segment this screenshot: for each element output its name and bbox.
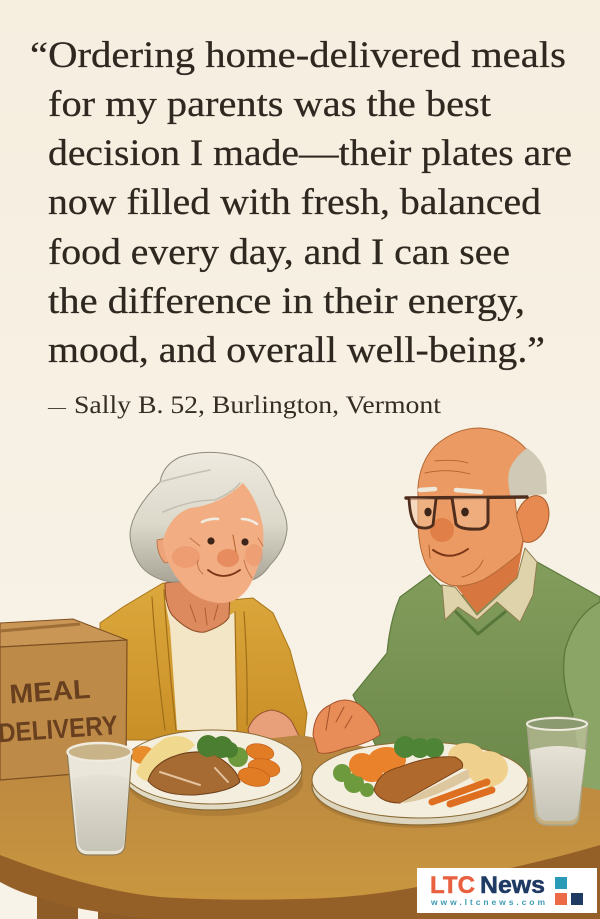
man smile — [433, 549, 468, 556]
man v-neck — [456, 612, 505, 634]
man neck — [455, 540, 524, 613]
potato — [448, 743, 508, 787]
woman hand — [248, 710, 300, 740]
man ear — [509, 491, 555, 547]
man eyebrows — [420, 489, 481, 492]
logo wordmark: LTC — [430, 872, 475, 899]
woman neck — [165, 580, 230, 632]
box top — [0, 619, 127, 647]
left meal plate — [122, 730, 303, 816]
broccoli — [394, 736, 444, 758]
broccoli — [197, 735, 248, 767]
woman eyes — [207, 537, 249, 546]
right meal plate — [312, 736, 528, 828]
attribution: Sally B. 52, Burlington, Vermont — [74, 392, 441, 419]
woman cardigan — [100, 583, 307, 740]
woman wrinkles — [190, 538, 263, 578]
right water glass — [527, 717, 588, 825]
quote text: decision I made—their plates are — [48, 133, 572, 174]
man sweater — [353, 562, 600, 800]
man eyes — [424, 508, 469, 516]
man glasses — [406, 497, 527, 529]
meat — [148, 752, 240, 795]
woman ear — [157, 538, 172, 563]
man hand — [313, 700, 380, 753]
table edge — [0, 840, 600, 919]
quote text: now filled with fresh, balanced — [48, 182, 542, 223]
LTC News logo: News — [480, 872, 545, 899]
man collar — [442, 548, 537, 622]
woman cardigan edges — [152, 590, 247, 730]
woman smile — [208, 570, 240, 576]
quote text: for my parents was the best — [48, 84, 492, 125]
man forehead lines — [425, 460, 470, 474]
man nose — [430, 518, 454, 542]
quote text: mood, and overall well-being.” — [48, 330, 545, 371]
delivery box — [0, 619, 127, 780]
box front — [0, 640, 127, 780]
logo url: www.ltcnews.com — [430, 897, 545, 907]
brussels sprouts — [333, 764, 374, 797]
woman shirt — [165, 600, 237, 730]
quote text — [30, 35, 572, 371]
potato — [136, 736, 195, 782]
attribution: — — [47, 397, 67, 417]
illustration: woman — [100, 452, 307, 740]
carrots — [432, 782, 492, 804]
box label: DELIVERY — [0, 710, 119, 748]
illustration: man — [353, 428, 600, 800]
quote text: “Ordering home-delivered meals — [30, 35, 566, 76]
woman nose — [217, 535, 239, 567]
table legs — [37, 890, 150, 919]
man head — [418, 428, 527, 586]
woman hair — [130, 452, 287, 582]
left orange — [131, 746, 155, 764]
carrots — [236, 741, 281, 789]
logo squares — [555, 877, 583, 905]
left water glass — [67, 743, 132, 855]
table — [0, 700, 600, 919]
man right arm — [564, 602, 600, 800]
LTC News logo — [417, 868, 597, 913]
woman eyebrows — [202, 519, 257, 524]
woman face — [163, 483, 263, 603]
quote text: food every day, and I can see — [48, 232, 510, 273]
table top — [0, 735, 600, 900]
orange pieces — [349, 747, 406, 782]
man face lines — [429, 545, 483, 577]
meat — [374, 757, 463, 803]
box label — [0, 672, 119, 748]
quote text: the difference in their energy, — [48, 281, 525, 322]
man hair — [508, 448, 547, 497]
box label: MEAL — [8, 674, 91, 709]
